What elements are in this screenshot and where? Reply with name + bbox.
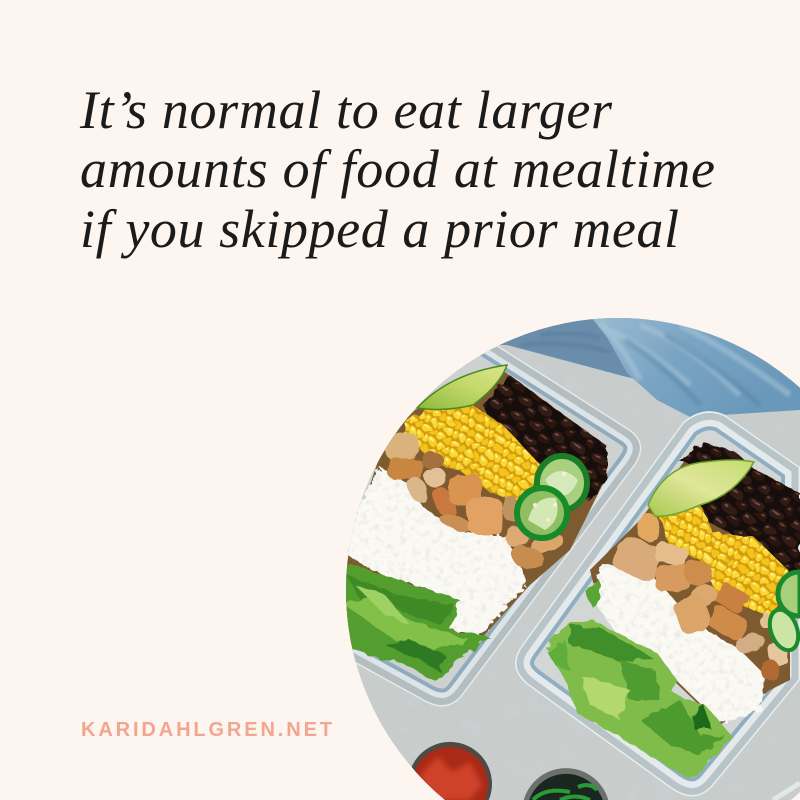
website credit: KARIDAHLGREN.NET xyxy=(81,719,332,741)
food: beans xyxy=(483,375,606,502)
icon: salsa bowl xyxy=(408,742,492,800)
icon: jalapeno bowl xyxy=(524,768,608,800)
food: lettuce xyxy=(545,580,733,780)
infographic canvas xyxy=(80,90,800,800)
title: It’s normal to eat larger xyxy=(79,80,613,140)
food: rice xyxy=(344,467,527,637)
food: chicken pieces xyxy=(610,513,788,681)
food: lime wedge xyxy=(648,460,754,516)
title: amounts of food at mealtime xyxy=(80,139,715,199)
box: glass frame xyxy=(515,411,800,797)
food: chicken pieces xyxy=(383,432,566,573)
food: lettuce xyxy=(340,560,490,683)
food: jalapeno slices xyxy=(765,572,800,654)
container: left meal prep box xyxy=(346,346,642,706)
food: corn xyxy=(404,406,540,500)
food: base shadow xyxy=(590,447,790,725)
food: beans xyxy=(680,442,800,574)
container: right meal prep box xyxy=(515,411,800,797)
food: base shadow xyxy=(345,372,605,650)
third container corner xyxy=(773,783,800,800)
food: lime wedge xyxy=(417,365,507,409)
circular food photo xyxy=(346,318,800,800)
food: rice xyxy=(593,563,767,723)
box: glass frame xyxy=(350,346,642,706)
title: if you skipped a prior meal xyxy=(80,199,679,259)
concrete surface xyxy=(340,310,800,800)
food: jalapeno slices xyxy=(517,456,587,538)
icon: blue denim cloth xyxy=(490,312,800,417)
food: corn xyxy=(658,503,790,617)
title xyxy=(79,80,715,259)
